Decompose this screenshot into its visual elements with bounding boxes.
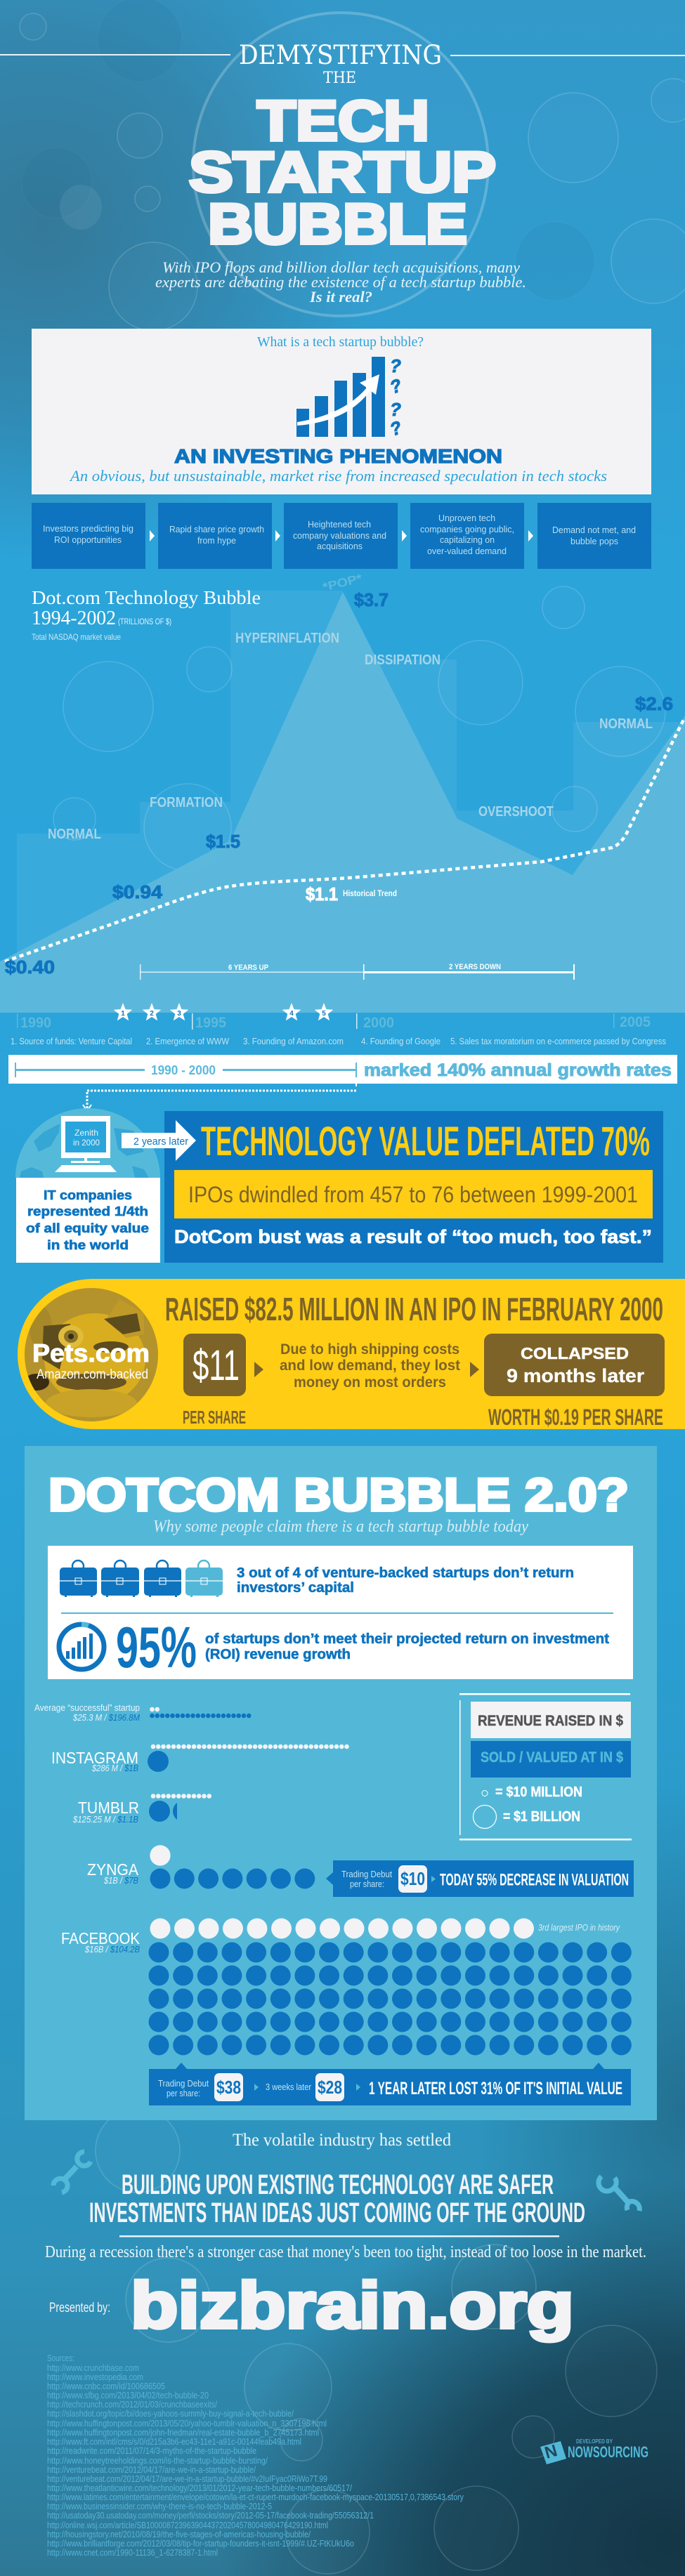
chart title bbox=[32, 587, 261, 642]
explanation: and low demand, they lost bbox=[280, 1358, 460, 1374]
explanation: Due to high shipping costs bbox=[280, 1341, 459, 1358]
timespan brackets: 6 YEARS UP bbox=[228, 964, 268, 972]
callout: zynga trading debut bbox=[326, 1860, 634, 1897]
panel: what is a tech startup bubble bbox=[32, 329, 651, 494]
event stars bbox=[114, 1003, 333, 1020]
event stars: 4 bbox=[289, 1010, 294, 1018]
callout: facebook trading debut: per share: bbox=[167, 2088, 200, 2098]
step 1 bbox=[32, 503, 145, 569]
collapsed callout: 9 months later bbox=[507, 1365, 645, 1386]
it companies statement: represented 1/4th bbox=[27, 1204, 148, 1218]
presented by: Presented by: bbox=[49, 2301, 110, 2315]
icon: ring with chart bbox=[59, 1624, 104, 1669]
growth bar: 1990-2000 bbox=[8, 1055, 677, 1086]
row: tumblr: $125.25 M / $1.1B bbox=[72, 1814, 138, 1825]
callout: facebook trading debut: $28 bbox=[318, 2077, 342, 2098]
ipo callout bbox=[174, 1170, 653, 1218]
title: DEMYSTIFYING bbox=[239, 40, 442, 70]
step 4: companies going public, bbox=[420, 524, 514, 534]
sources: http://slashdot.org/topic/bi/does-yahoos-summly-buy-signal-a-tech-bubble/ bbox=[47, 2408, 294, 2419]
sources: http://www.huffingtonpost.com/2013/05/20/yahoo-tumblr-valuation_n_3307198.html bbox=[47, 2418, 327, 2429]
collapsed callout bbox=[484, 1334, 665, 1430]
legend: sold or valued bbox=[471, 1741, 631, 1777]
sources: http://www.honeytreeholdings.com/is-the-startup-bubble-bursting/ bbox=[47, 2455, 268, 2466]
dotcom bust note: DotCom bust was a result of “too much, too fast.” bbox=[174, 1226, 652, 1247]
step 5: Demand not met, and bbox=[552, 525, 636, 535]
logo: nowsourcing: DEVELOPED BY bbox=[576, 2438, 613, 2445]
row: instagram bbox=[51, 1747, 350, 1773]
process flow bbox=[32, 503, 651, 569]
step 2: Rapid share price growth bbox=[169, 524, 264, 534]
intro text: With IPO flops and billion dollar tech acquisitions, many bbox=[162, 258, 520, 276]
legend: one billion: = $1 BILLION bbox=[503, 1809, 580, 1825]
step 5: bubble pops bbox=[570, 536, 618, 546]
callout: zynga trading debut: $10 bbox=[400, 1868, 425, 1889]
sources: http://www.businessinsider.com/why-there-is-no-tech-bubble-2012-5 bbox=[47, 2501, 272, 2511]
value labels: $1.1 bbox=[306, 883, 338, 905]
growth bar: 1990-2000: 1990 - 2000 bbox=[151, 1063, 216, 1077]
sources: http://www.brilliantforge.com/2012/03/08/tip-for-startup-founders-it-isnt-1999/#.UZ-FtKUkU6o bbox=[47, 2538, 354, 2549]
value labels: $2.6 bbox=[635, 693, 673, 714]
step 4: over-valued demand bbox=[427, 546, 507, 556]
stat: 3 out of 4: investors’ capital bbox=[237, 1580, 354, 1596]
icon: wrench left bbox=[53, 2152, 91, 2193]
step 4: Unproven tech bbox=[438, 513, 495, 523]
sources: Sources: bbox=[47, 2353, 74, 2363]
pets.com logo text: Pets.com bbox=[32, 1339, 150, 1367]
row: zynga: $1B / $7B bbox=[103, 1875, 138, 1886]
step 2: from hype bbox=[197, 535, 236, 546]
icon: rising bar chart with arrow and question marks: ? bbox=[387, 416, 405, 440]
event footnotes: 4. Founding of Google bbox=[361, 1036, 441, 1046]
title: BUBBLE bbox=[208, 192, 467, 256]
legend: revenue raised bbox=[471, 1702, 631, 1738]
legend: one billion bbox=[474, 1805, 580, 1829]
stage labels: FORMATION bbox=[150, 795, 223, 810]
timespan brackets: 2 YEARS DOWN bbox=[449, 963, 501, 971]
subheading: Why some people claim there is a tech startup bubble today bbox=[153, 1518, 528, 1536]
pop label: *POP* bbox=[321, 572, 364, 594]
explanation bbox=[280, 1341, 460, 1391]
value labels: $1.5 bbox=[206, 831, 240, 852]
sources: http://www.cnet.com/1990-11136_1-6278387-1.html bbox=[47, 2547, 218, 2558]
it companies statement bbox=[16, 1178, 160, 1263]
ipo callout: IPOs dwindled from 457 to 76 between 1999-2001 bbox=[188, 1182, 638, 1207]
heading: DOTCOM BUBBLE 2.0? bbox=[48, 1468, 629, 1520]
stat text bbox=[205, 1631, 609, 1662]
title: TECH bbox=[257, 90, 429, 153]
row: instagram: INSTAGRAM bbox=[51, 1749, 138, 1767]
sources: http://housingstory.net/2010/08/19/the-five-stages-of-americas-housing-bubble/ bbox=[47, 2529, 311, 2539]
definition: An obvious, but unsustainable, market rise from increased speculation in tech stocks bbox=[69, 467, 607, 485]
arrow 3 bbox=[402, 530, 407, 541]
event stars: 5 bbox=[322, 1010, 326, 1018]
arrow 2 bbox=[275, 530, 280, 541]
panel: technology value deflated bbox=[164, 1111, 663, 1263]
stage labels bbox=[48, 631, 653, 842]
title: THE bbox=[323, 70, 356, 87]
sources: http://venturebeat.com/2012/04/17/are-we-in-a-startup-bubble/#v2IuIFyac0RiWo7T.99 bbox=[47, 2473, 327, 2484]
panel: zenith in 2000 bbox=[15, 1108, 196, 1263]
sources: http://online.wsj.com/article/SB10000872396390443720204578004980476429190.html bbox=[47, 2520, 328, 2530]
row: average startup: $25.3 M / $196.8M bbox=[72, 1712, 140, 1723]
sources: http://www.ft.com/intl/cms/s/0/d215a3b6-ec43-11e1-a91c-00144feab49a.html bbox=[47, 2436, 301, 2447]
row: average startup bbox=[34, 1702, 249, 1723]
pets.com logo text bbox=[32, 1339, 150, 1382]
row: tumblr bbox=[72, 1796, 214, 1825]
sources: http://www.sfbg.com/2013/04/02/tech-bubble-20 bbox=[47, 2390, 209, 2400]
step 5 bbox=[537, 503, 651, 569]
arrow bbox=[470, 1362, 479, 1377]
logo: nowsourcing bbox=[540, 2438, 648, 2464]
collapsed callout: COLLAPSED bbox=[521, 1344, 629, 1362]
callout: zynga trading debut: per share: bbox=[350, 1879, 384, 1889]
sources: http://www.crunchbase.com bbox=[47, 2363, 139, 2373]
arrow: 2 years later: 2 years later bbox=[133, 1136, 188, 1148]
stats panel bbox=[48, 1546, 633, 1680]
stage labels: OVERSHOOT bbox=[478, 804, 554, 820]
icon: rising bar chart with arrow and question marks: ? bbox=[390, 399, 401, 420]
value labels: $0.40 bbox=[5, 957, 55, 978]
sources: http://www.latimes.com/entertainment/envelope/cotown/la-et-ct-rupert-murdoch-facebook-myspace-20130517,0,7386543.story bbox=[47, 2492, 464, 2502]
legend: ten million: = $10 MILLION bbox=[495, 1785, 582, 1800]
callout: facebook trading debut bbox=[149, 2063, 631, 2105]
stat text: of startups don’t meet their projected return on investment bbox=[205, 1631, 609, 1647]
closing statement bbox=[45, 2131, 646, 2261]
step 3 bbox=[284, 503, 398, 569]
it companies statement: of all equity value bbox=[26, 1221, 149, 1235]
question heading: What is a tech startup bubble? bbox=[257, 334, 424, 350]
it companies statement: in the world bbox=[47, 1238, 129, 1252]
stage labels: HYPERINFLATION bbox=[235, 631, 339, 646]
panel: pets.com bbox=[18, 1279, 685, 1430]
arrow: 2 years later bbox=[122, 1120, 196, 1161]
value labels: $0.94 bbox=[112, 881, 163, 902]
sources: http://www.huffingtonpost.com/john-friedman/real-estate-bubble_b_2745173.html bbox=[47, 2427, 319, 2438]
value labels bbox=[5, 589, 673, 978]
sources: http://techcrunch.com/2012/01/03/crunchbaseexits/ bbox=[47, 2399, 217, 2410]
stage blocks bbox=[17, 591, 685, 1013]
chart title: Dot.com Technology Bubble bbox=[32, 587, 261, 608]
stat: 95%: 95% bbox=[116, 1615, 197, 1680]
arrow 1 bbox=[150, 530, 155, 541]
explanation: money on most orders bbox=[294, 1374, 446, 1391]
dotted historical trend line bbox=[5, 717, 685, 961]
step 2 bbox=[158, 503, 272, 569]
callout: zynga trading debut: Trading Debut bbox=[341, 1869, 392, 1879]
chart: dot.com technology bubble bbox=[0, 572, 685, 1046]
row: facebook bbox=[61, 1922, 631, 2105]
step 3: Heightened tech bbox=[308, 519, 371, 530]
globe bbox=[15, 1108, 160, 1178]
year axis: 1990 bbox=[20, 1015, 51, 1031]
event footnotes: 2. Emergence of WWW bbox=[146, 1036, 230, 1046]
logo: nowsourcing: N bbox=[542, 2441, 559, 2463]
legend: revenue raised: REVENUE RAISED IN $ bbox=[478, 1713, 623, 1729]
step 4 bbox=[410, 503, 524, 569]
stage labels: NORMAL bbox=[48, 827, 101, 842]
icon: rising bar chart with arrow and question marks: ? bbox=[390, 355, 401, 376]
value labels: Historical Trend bbox=[343, 888, 397, 898]
step 1: ROI opportunities bbox=[54, 534, 122, 545]
sources: http://www.investopedia.com bbox=[47, 2372, 143, 2382]
icon: computer monitor bbox=[55, 1116, 117, 1172]
ipo price bbox=[183, 1334, 246, 1428]
title bbox=[0, 40, 685, 256]
sources: http://venturebeat.com/2012/04/17/are-we-in-a-startup-bubble/ bbox=[47, 2464, 256, 2475]
event footnotes bbox=[11, 1036, 666, 1046]
row: facebook: FACEBOOK bbox=[61, 1929, 141, 1947]
ipo price: PER SHARE bbox=[183, 1407, 246, 1428]
ipo price: $11 bbox=[193, 1341, 240, 1389]
stat text: (ROI) revenue growth bbox=[205, 1647, 351, 1662]
event stars: 2 bbox=[150, 1010, 154, 1018]
stage labels: DISSIPATION bbox=[365, 652, 441, 668]
sources: http://www.cnbc.com/id/100686505 bbox=[47, 2381, 165, 2391]
panel: dotcom bubble 2.0 bbox=[25, 1446, 657, 2558]
presented by: bizbrain.org bbox=[131, 2268, 574, 2341]
event footnotes: 1. Source of funds: Venture Capital bbox=[11, 1036, 132, 1046]
timespan brackets bbox=[140, 963, 575, 980]
event footnotes: 3. Founding of Amazon.com bbox=[243, 1036, 344, 1046]
icon: four briefcases bbox=[60, 1560, 223, 1597]
value labels: $3.7 bbox=[354, 589, 389, 610]
step 1: Investors predicting big bbox=[43, 523, 133, 534]
callout: facebook trading debut: 3 weeks later bbox=[266, 2082, 312, 2092]
chart title: Total NASDAQ market value bbox=[32, 632, 121, 642]
photo: pets.com mascot bbox=[24, 1287, 158, 1422]
pets.com logo text: Amazon.com-backed bbox=[37, 1367, 148, 1382]
stage labels: NORMAL bbox=[599, 716, 653, 732]
arrow 4 bbox=[528, 530, 533, 541]
icon: rising bar chart with arrow and question marks bbox=[296, 355, 405, 440]
intro text bbox=[155, 258, 526, 305]
growth bar: 1990-2000: marked 140% annual growth rates bbox=[364, 1060, 672, 1080]
stat: 3 out of 4: 3 out of 4 of venture-backed startups don’t return bbox=[237, 1565, 574, 1581]
sources: http://www.theatlanticwire.com/technology/2013/01/2012-year-tech-bubble-numbers/60517/ bbox=[47, 2483, 352, 2493]
sources: http://usatoday30.usatoday.com/money/perfi/stocks/story/2012-05-17/facebook-trading/55056312/1 bbox=[47, 2510, 374, 2521]
event stars: 1 bbox=[121, 1010, 125, 1018]
sources: http://readwrite.com/2011/07/14/3-myths-of-the-startup-bubble bbox=[47, 2445, 256, 2456]
year axis: 2005 bbox=[620, 1014, 651, 1030]
row: zynga: ZYNGA bbox=[87, 1860, 139, 1879]
row: zynga bbox=[87, 1845, 634, 1897]
step 3: company valuations and bbox=[293, 530, 386, 541]
year axis: 2000 bbox=[363, 1015, 394, 1031]
row: facebook: $16B / $104.2B bbox=[84, 1944, 140, 1954]
step 4: capitalizing on bbox=[440, 534, 495, 545]
heading: an investing phenomenon: AN INVESTING PHENOMENON bbox=[174, 445, 502, 467]
chart title: 1994-2002 bbox=[32, 607, 116, 629]
icon: rising bar chart with arrow and question marks: ? bbox=[387, 374, 405, 398]
chart title: (TRILLIONS OF $) bbox=[118, 617, 171, 626]
legend bbox=[459, 1693, 632, 1840]
row: tumblr: TUMBLR bbox=[78, 1799, 139, 1817]
stat: 3 out of 4 bbox=[237, 1565, 574, 1596]
closing statement: The volatile industry has settled bbox=[233, 2131, 451, 2150]
it companies statement: IT companies bbox=[44, 1188, 132, 1202]
title: STARTUP bbox=[189, 140, 496, 204]
row: instagram: $286 M / $1B bbox=[91, 1763, 138, 1773]
callout: facebook trading debut: Trading Debut bbox=[158, 2078, 209, 2089]
year axis bbox=[17, 1013, 651, 1031]
event stars: 3 bbox=[177, 1010, 181, 1018]
arrow bbox=[254, 1362, 263, 1377]
icon: computer monitor: in 2000 bbox=[73, 1138, 100, 1148]
year axis: 1995 bbox=[195, 1015, 226, 1031]
row: facebook: 3rd largest IPO in history bbox=[538, 1922, 620, 1933]
dotted connector arrow bbox=[83, 1091, 356, 1111]
callout: facebook trading debut: $38 bbox=[216, 2077, 241, 2098]
row: average startup: Average “successful” startup bbox=[34, 1702, 140, 1713]
area: market value bbox=[0, 592, 685, 1013]
icon: wrench right bbox=[599, 2176, 639, 2211]
icon: computer monitor: Zenith bbox=[74, 1128, 98, 1138]
intro text: experts are debating the existence of a tech startup bubble. bbox=[155, 273, 526, 291]
legend: sold or valued: SOLD / VALUED AT IN $ bbox=[481, 1749, 623, 1766]
intro text: Is it real? bbox=[309, 288, 372, 305]
sources bbox=[47, 2353, 464, 2558]
step 3: acquisitions bbox=[317, 541, 363, 551]
